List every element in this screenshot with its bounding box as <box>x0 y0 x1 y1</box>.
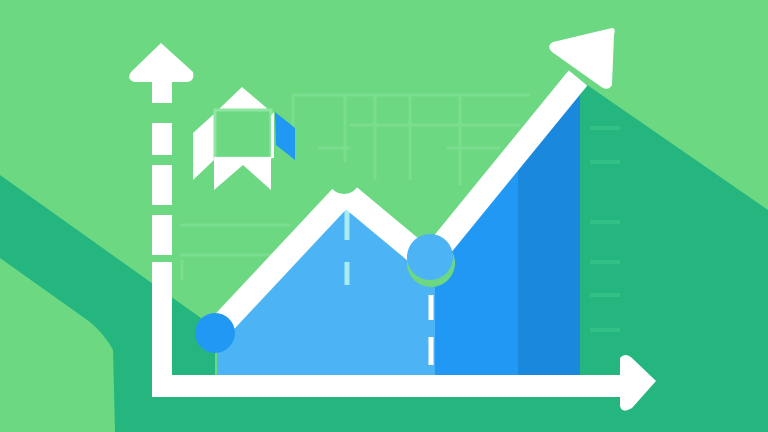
area chart fill <box>217 88 580 375</box>
trend line with arrow <box>214 28 615 333</box>
background: dark green band left <box>0 175 215 432</box>
x axis with arrow <box>152 355 656 411</box>
background: dark green right <box>560 80 768 432</box>
background grid <box>180 95 530 280</box>
y axis with arrow <box>129 43 193 397</box>
data points <box>195 162 455 353</box>
dashed drop lines <box>344 205 350 285</box>
icon: rocket badge <box>193 87 295 190</box>
